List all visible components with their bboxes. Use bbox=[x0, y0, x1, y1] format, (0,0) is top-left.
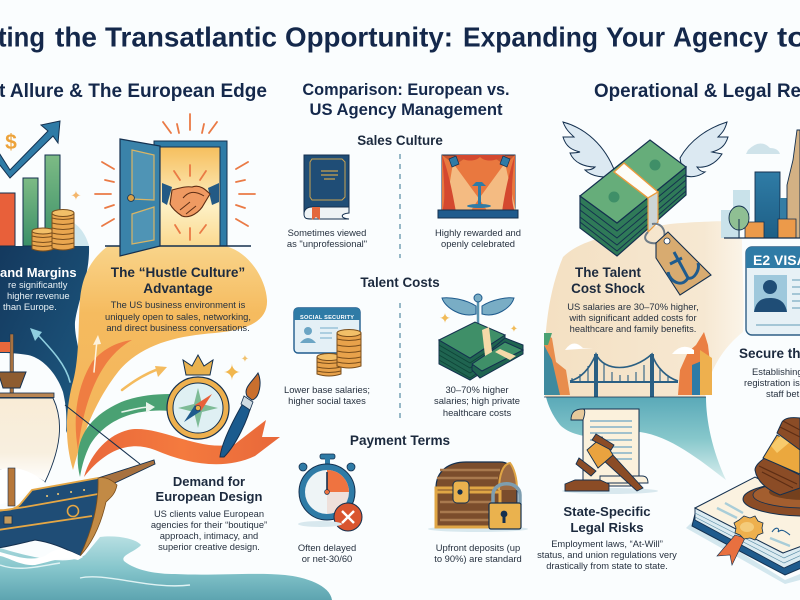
heading: comparison bbox=[302, 81, 510, 119]
icon: crown, compass and paintbrush bbox=[167, 354, 260, 457]
section heading: payment terms: Payment Terms bbox=[350, 433, 450, 448]
text: state-specific legal risks bbox=[537, 504, 677, 571]
icon: crown, compass and paintbrush: ✦ bbox=[241, 354, 249, 365]
orange ribbon to design bbox=[84, 420, 280, 477]
text: talent costs US: salaries; high private bbox=[434, 395, 520, 406]
text: state-specific legal risks: status, and union regulations very bbox=[537, 550, 677, 560]
text: secure the visa bbox=[739, 346, 800, 399]
title: Opportunity: bbox=[285, 22, 453, 52]
text: sales culture Europe: Sometimes viewed bbox=[288, 227, 366, 238]
text: demand for European design: European Design bbox=[156, 489, 263, 504]
text: demand for European design: superior creative design. bbox=[158, 542, 260, 552]
icon: gavel on legal document bbox=[686, 418, 800, 584]
waves bbox=[0, 536, 332, 600]
icon: caduceus and cash stacks bbox=[439, 294, 523, 380]
text: sales culture US bbox=[435, 227, 521, 249]
text: payment terms US: Upfront deposits (up bbox=[436, 542, 520, 553]
icon: E2 visa card bbox=[746, 247, 800, 335]
text: hustle culture advantage: The “Hustle Culture” bbox=[111, 265, 245, 280]
text: sales culture US: Highly rewarded and bbox=[435, 227, 521, 238]
text: talent costs Europe: higher social taxes bbox=[288, 395, 366, 406]
text: the talent cost shock: Cost Shock bbox=[571, 281, 645, 296]
text: talent costs US bbox=[434, 384, 520, 418]
text: secure the visa: staff bet bbox=[766, 388, 800, 399]
icon: book bbox=[304, 155, 349, 220]
panel: comparison of European and US agency management bbox=[284, 81, 528, 564]
heading: comparison: Comparison: European vs. bbox=[302, 81, 510, 99]
orange ribbon stripe bbox=[76, 340, 132, 450]
icon: caduceus and cash stacks: ✦ bbox=[439, 310, 451, 326]
cream blob bbox=[544, 221, 744, 397]
text: revenue and margins bbox=[0, 265, 77, 312]
icon: social security card with coins: SOCIAL SECURITY bbox=[300, 315, 354, 321]
text: the talent cost shock: US salaries are 30–70% higher, bbox=[567, 302, 699, 312]
text: sales culture Europe bbox=[287, 227, 367, 249]
text: state-specific legal risks: Employment laws, “At-Will” bbox=[551, 539, 663, 549]
text: revenue and margins: than Europe. bbox=[3, 301, 57, 312]
text: payment terms US bbox=[434, 542, 522, 564]
icon: social security card with coins bbox=[294, 308, 361, 376]
text: talent costs Europe bbox=[284, 384, 370, 406]
icon: sailing ship bbox=[0, 334, 190, 586]
icon: spotlit stage bbox=[438, 155, 518, 218]
title: Transatlantic bbox=[105, 22, 277, 52]
text: hustle culture advantage: and direct business conversations. bbox=[106, 323, 250, 333]
title: the bbox=[55, 22, 97, 52]
text: demand for European design: approach, intimacy, and bbox=[160, 531, 258, 541]
text: the talent cost shock: healthcare and family benefits. bbox=[570, 324, 696, 334]
icon: caduceus and cash stacks: ✦ bbox=[510, 324, 518, 335]
section heading: sales culture: Sales Culture bbox=[357, 133, 443, 148]
panel: market allure and the European edge bbox=[0, 80, 332, 600]
text: secure the visa: Secure th bbox=[739, 346, 800, 361]
text: talent costs US: healthcare costs bbox=[443, 407, 511, 418]
icon: flying cash with anchor tag bbox=[563, 122, 728, 295]
text: state-specific legal risks: Legal Risks bbox=[570, 520, 644, 535]
icon: crown, compass and paintbrush: ✦ bbox=[223, 360, 241, 385]
text: demand for European design: Demand for bbox=[173, 474, 245, 489]
text: sales culture US: openly celebrated bbox=[441, 238, 515, 249]
text: talent costs US: 30–70% higher bbox=[445, 384, 509, 395]
panel: operational and legal realities bbox=[537, 81, 800, 584]
text: payment terms Europe: or net-30/60 bbox=[302, 553, 352, 564]
icon: stopwatch with badge bbox=[298, 454, 362, 531]
text: hustle culture advantage bbox=[105, 265, 251, 333]
navy ribbon background bbox=[0, 246, 89, 433]
text: demand for European design: US clients value European bbox=[154, 509, 264, 519]
icon: contract scroll with gavel bbox=[562, 409, 658, 494]
text: state-specific legal risks: drastically from state to state. bbox=[546, 561, 668, 571]
teal water bbox=[546, 397, 726, 480]
text: payment terms US: to 90%) are standard bbox=[434, 553, 522, 564]
flow arrows bbox=[30, 328, 167, 413]
icon: city skyline bbox=[721, 130, 800, 238]
icon: open door with handshake bbox=[95, 114, 255, 256]
title: Agency bbox=[673, 22, 768, 52]
icon: revenue chart bbox=[0, 121, 89, 251]
icon: treasure chest with padlock bbox=[428, 462, 528, 532]
text: hustle culture advantage: uniquely open to sales, networking, bbox=[105, 312, 251, 322]
text: the talent cost shock: The Talent bbox=[575, 265, 642, 280]
icon: revenue chart: $ bbox=[5, 131, 17, 154]
section heading: talent costs: Talent Costs bbox=[360, 275, 440, 290]
icon: revenue chart: ✦ bbox=[71, 188, 82, 203]
heading: comparison: US Agency Management bbox=[309, 100, 503, 119]
text: talent costs Europe: Lower base salaries; bbox=[284, 384, 370, 395]
heading: operational and legal: Operational & Legal Re bbox=[594, 81, 800, 102]
text: state-specific legal risks: State-Specific bbox=[563, 504, 651, 519]
text: demand for European design: agencies for their “boutique” bbox=[151, 520, 267, 530]
text: payment terms Europe: Often delayed bbox=[298, 542, 356, 553]
icon: bridge and skyline bbox=[544, 332, 712, 397]
text: secure the visa: registration is bbox=[744, 377, 800, 388]
green ribbon bbox=[78, 394, 170, 477]
text: revenue and margins: and Margins bbox=[0, 265, 77, 280]
text: demand for European design bbox=[151, 474, 267, 552]
text: the talent cost shock: with significant added costs for bbox=[568, 313, 697, 323]
text: sales culture Europe: as "unprofessional" bbox=[287, 238, 367, 249]
title: Expanding bbox=[463, 22, 598, 52]
title: Your bbox=[606, 22, 665, 52]
text: hustle culture advantage: Advantage bbox=[143, 281, 213, 296]
heading: market allure: t Allure & The European Edge bbox=[0, 80, 267, 102]
text: hustle culture advantage: The US business environment is bbox=[111, 300, 246, 310]
title bbox=[0, 22, 800, 52]
orange flowing blob bbox=[67, 246, 267, 470]
text: revenue and margins: higher revenue bbox=[7, 290, 70, 301]
text: payment terms Europe bbox=[298, 542, 356, 564]
text: revenue and margins: re significantly bbox=[8, 279, 68, 290]
text: the talent cost shock bbox=[567, 265, 699, 334]
